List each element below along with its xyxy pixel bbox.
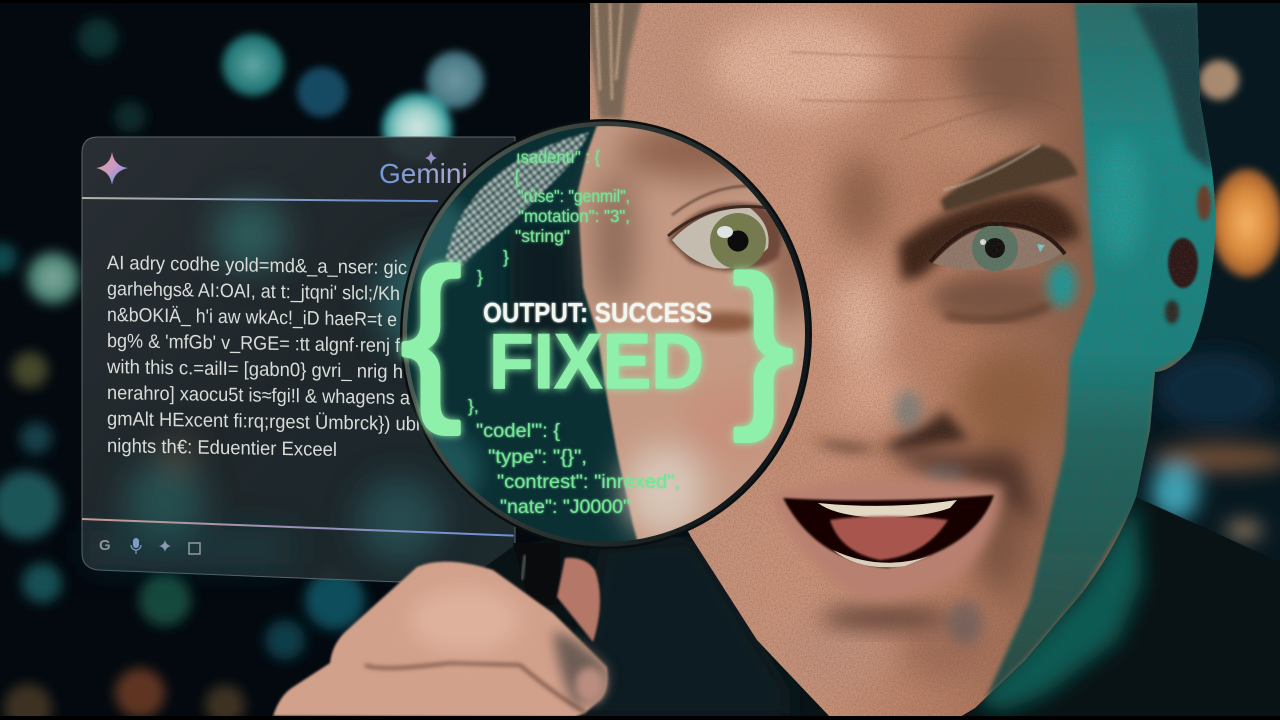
teal hair [1132,3,1212,172]
FIXED headline: FIXED [489,317,704,405]
left curly brace: { [401,233,461,435]
lens code text: } [477,267,483,287]
magnifier handle [513,543,560,605]
chat text block: nights th€: Eduentier Exceel [107,435,337,461]
stubble [820,606,950,630]
icon row [99,537,200,554]
forehead wrinkles [790,50,980,140]
shirt [470,497,1280,720]
under-eye bag [930,274,1054,322]
person: face and head [585,0,1230,720]
lens code text: }, [468,396,479,416]
skin shading [710,15,1065,690]
lens code text: "type": "{}", [488,446,587,468]
skin grain [590,0,1230,720]
lens code text: "nate": "J0000" [500,496,630,518]
chat text block [106,252,420,462]
lens magnified skin [578,125,810,550]
lens code text: "rüse": "genmil", [518,186,630,206]
right curly brace: } [733,240,793,442]
eyebrow [940,145,1078,212]
neck [975,497,1142,712]
lens code text: ısadentı" : { [516,147,600,167]
icon: Gemini sparkle [96,152,128,185]
ear [1168,238,1198,288]
lens background [414,196,584,494]
panel: Gemini chat window [82,137,515,584]
chat text block: n&bOKIÄ_ h'i aw wkAc!_iD haeR=t e [107,304,397,331]
lens code text: { [514,167,520,187]
output label: OUTPUT: SUCCESS [483,297,712,328]
teal side light [985,3,1220,700]
hair left [585,0,642,118]
Gemini wordmark: Gemini [379,158,468,189]
magnifying glass [392,119,820,550]
lens code text: "string" [515,226,570,246]
lens contents [407,126,805,542]
chat text block: AI adry codhe yold=md&_a_nser: gic [107,252,407,279]
chat text block: gmAlt HExcent fi:rq;rgest Ümbrck}) ubi [107,408,420,435]
icon row: G [99,537,111,554]
lens code text: "motation": "3", [518,206,630,226]
chat text block: bg% & 'mfGb' v_RGE= :tt algnf·renj f [107,330,401,357]
dotted mesh [445,132,590,272]
nose [812,390,1038,525]
chat text block: with this c.=ailI= [gabn0} gvri_ nrig h [106,356,403,383]
right eye [930,224,1065,271]
lens code text: "codel'": { [476,420,560,442]
head shape [590,3,1215,717]
lens code text [468,147,680,518]
lens eye [668,186,781,271]
mouth [772,480,1003,600]
chat text block: nerahro] xaocu5t is≈fgi!l & whagens a [107,382,410,409]
hand holding magnifier [273,558,608,717]
chat text block: garhehgs& AI:OAI, at t:_jtqni' slcl;/Kh [107,278,400,305]
under-brow shadow [898,192,1080,282]
lens code text: "contrest": "inrexed", [497,471,680,493]
lens code text: } [503,247,509,267]
